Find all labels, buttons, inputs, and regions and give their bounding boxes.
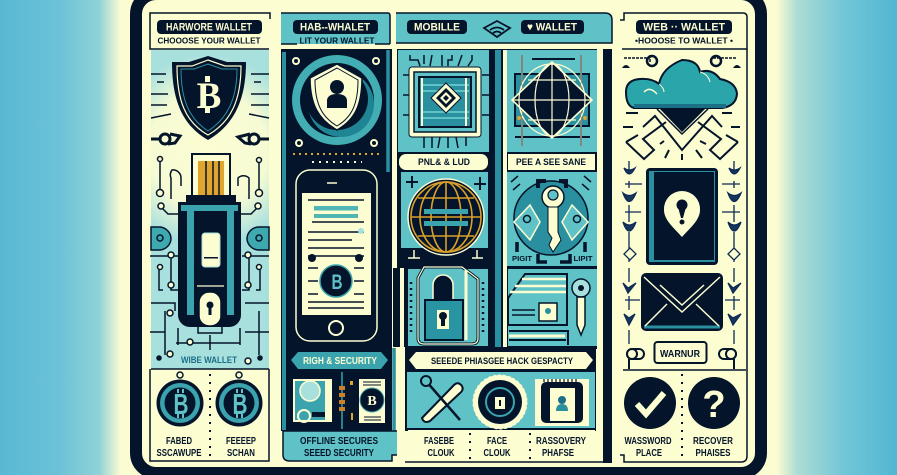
- caption: fasebe: CLOUK: [428, 448, 455, 459]
- heading: hardware wallet: HARWORE WALLET: [166, 22, 252, 34]
- banner: high security: RIGH & SECURITY: [303, 356, 377, 367]
- icon: check circle: [624, 377, 676, 429]
- tile: key: LIPIT: [574, 254, 593, 263]
- caption: offline secures: SEEED SECURITY: [304, 448, 374, 459]
- panel: mobile wallet: [393, 13, 612, 463]
- tile: padlock: [408, 267, 488, 346]
- icon: id badge: [535, 379, 589, 426]
- banner: seed phrase: [409, 352, 593, 369]
- icon: bitcoin shield: B: [197, 76, 221, 117]
- caption: face: CLOUK: [484, 448, 511, 459]
- icon: phone: B: [332, 271, 342, 294]
- icon: left clips: [627, 349, 644, 369]
- icon: card with location pin: [646, 168, 718, 265]
- heading: web wallet: •HOOOSE TO WALLET •: [635, 36, 733, 46]
- side stripes beside lower tiles: [393, 268, 408, 347]
- icon: crossed tools: [421, 376, 463, 422]
- heading: hab whalet: LIT YOUR WALLET: [300, 36, 375, 46]
- label: pee a see sane: PEE A SEE SANE: [516, 157, 586, 167]
- heading: web wallet: WEB ·· WALLET: [643, 22, 725, 34]
- tile strip: tools: [407, 372, 595, 429]
- coins and captions: [150, 369, 269, 461]
- icon: coin left: B: [174, 389, 188, 421]
- caption: recovery phrase: RASSOVERY: [536, 436, 586, 447]
- label: warnur: [654, 342, 706, 363]
- caption left: FABED: [166, 436, 192, 447]
- caption right: SCHAN: [227, 448, 255, 459]
- caption: recover phrases: PHAISES: [696, 448, 731, 459]
- tile: gold globe: [393, 172, 489, 268]
- dotted dividers: [293, 154, 380, 162]
- icon: envelope: [641, 273, 723, 331]
- icon: wifi: [484, 21, 510, 37]
- heading: web wallet: [620, 13, 747, 49]
- dark panel: [281, 49, 392, 431]
- caption: password place: WASSWORD: [624, 436, 672, 447]
- icon: decorative arrows right: [722, 161, 741, 344]
- banner: seed phrase: SEEEDE PHIASGEE HACK GESPACTY: [431, 356, 574, 367]
- banner: high security: [291, 352, 388, 369]
- caption: fasebe: FASEBE: [424, 436, 454, 447]
- icon: usb hardware wallet: [178, 154, 241, 333]
- pill: mobille: MOBILLE: [414, 22, 460, 34]
- caption: recovery phrase: PHAFSE: [542, 448, 574, 459]
- panel: web wallet: [620, 13, 747, 462]
- caption: recover phrases: RECOVER: [693, 436, 734, 447]
- icon: right clips: [719, 349, 736, 369]
- label: wibe wallet: WIBE WALLET: [181, 355, 237, 366]
- tile: key: PIGIT: [512, 254, 532, 263]
- heading: hab whalet: [281, 13, 390, 46]
- card: qr document: [293, 379, 332, 422]
- icon: question circle: [688, 377, 740, 429]
- side connector blocks: [151, 227, 269, 250]
- caption: password place: PLACE: [636, 448, 662, 459]
- icon: identity shield: [292, 55, 382, 146]
- label: pee a see sane: [508, 154, 595, 170]
- icon: phone: [296, 170, 377, 341]
- heading: hardware wallet: [150, 13, 270, 49]
- outer frame: [136, 0, 761, 473]
- caption: offline secures: OFFLINE SECURES: [300, 436, 378, 447]
- panel background: [151, 50, 269, 369]
- divider with gold bars: [339, 372, 353, 429]
- icon: coin right: B: [232, 389, 248, 421]
- circuit traces: [150, 156, 269, 364]
- heading: hab whalet: HAB--WHALET: [300, 22, 370, 34]
- caption right: FEEEEP: [226, 436, 256, 447]
- label: warnur: WARNUR: [660, 348, 700, 360]
- caption: face: FACE: [487, 436, 507, 447]
- label: pnl lud: [399, 154, 488, 170]
- card: bitcoin: [359, 379, 385, 423]
- panel: hardware wallet: [150, 13, 270, 461]
- shield rays: [151, 74, 269, 118]
- tile: globe diamond: [507, 50, 597, 152]
- icon: cloud: [626, 60, 737, 108]
- icon: seal lock: [473, 375, 527, 429]
- dark column background: [397, 49, 612, 431]
- pill: wallet: ♥ WALLET: [527, 22, 577, 34]
- tile: document and key: [508, 269, 597, 346]
- label: pnl lud: PNL& & LUD: [418, 157, 470, 167]
- caption: offline secures: [283, 431, 398, 461]
- icon: decorative arrows left: [623, 161, 642, 344]
- tile: chip: [398, 50, 489, 152]
- icon: question circle: ?: [702, 384, 726, 426]
- icon: bitcoin shield: [172, 56, 246, 140]
- panel: software wallet: [281, 13, 398, 461]
- heading: hardware wallet: CHOOOSE YOUR WALLET: [158, 36, 261, 46]
- tile: key: [507, 172, 597, 266]
- caption left: SSCAWUPE: [156, 448, 202, 459]
- icon: links: [151, 134, 269, 144]
- heading: mobile wallet: [396, 13, 612, 43]
- icon: cloud heart point and knot lines: [622, 55, 741, 160]
- card: bitcoin: B: [367, 394, 377, 409]
- captions row: [405, 430, 603, 462]
